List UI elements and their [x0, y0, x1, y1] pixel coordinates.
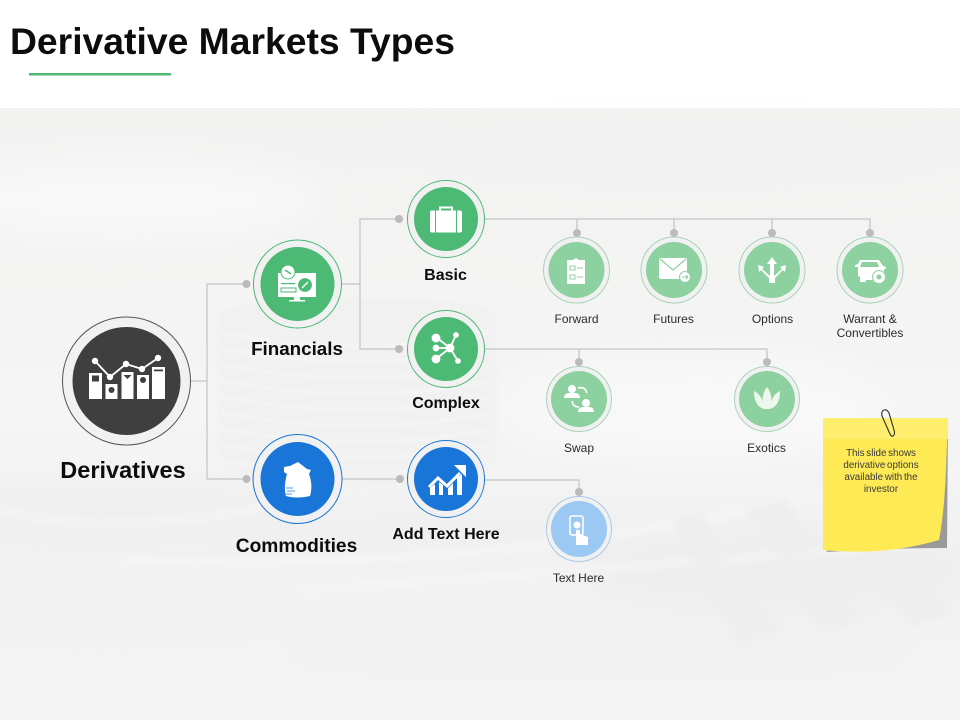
icon: bar and line chart: [89, 355, 165, 399]
note text: derivative options: [843, 460, 919, 471]
label: Basic: Basic: [424, 267, 467, 284]
sticky note: [823, 410, 948, 552]
title: Derivative Markets Types: [10, 20, 455, 62]
banknote numerals: [670, 490, 950, 642]
node: Futures: [641, 237, 707, 326]
label: Exotics: Exotics: [747, 441, 786, 455]
node: Derivatives: [60, 317, 190, 483]
label: Warrant and Convertibles: Warrant &: [843, 312, 897, 326]
node: Swap: [546, 366, 612, 455]
icon: people swap: [564, 385, 594, 412]
label: Forward: Forward: [554, 312, 599, 326]
label: Swap: Swap: [564, 441, 594, 455]
node: Basic: [408, 180, 484, 284]
node: Financials: [251, 240, 343, 359]
icon: network: [432, 333, 460, 363]
label: Text Here: Text Here: [553, 571, 604, 585]
icon: mail with arrow: [659, 258, 690, 282]
node: Forward: [544, 237, 610, 326]
connector lines: [190, 219, 870, 492]
icon: car with gear: [855, 260, 886, 284]
node: Complex: [408, 310, 484, 412]
label: Futures: Futures: [653, 312, 694, 326]
node: Exotics: [734, 366, 800, 455]
label: Derivatives: Derivatives: [60, 457, 186, 483]
banknote streaks: [0, 470, 960, 590]
icon: monitor with coins: [278, 265, 316, 302]
icon: growth chart: [429, 465, 466, 495]
note text: This slide shows: [846, 448, 916, 459]
label: Warrant and Convertibles: Convertibles: [837, 326, 903, 340]
node: Options: [739, 237, 805, 326]
icon: checklist: [567, 258, 585, 284]
label: Add Text Here: Add Text Here: [392, 526, 500, 543]
title underline: [29, 73, 171, 76]
label: Complex: Complex: [412, 395, 480, 412]
icon: leaves: [754, 387, 780, 409]
connector dots: [242, 215, 874, 496]
node: Warrant and Convertibles: [837, 237, 903, 340]
node: Text Here: [546, 496, 612, 585]
icon: briefcase: [430, 208, 462, 233]
note text: available with the: [844, 472, 918, 483]
icon: hand on phone: [570, 516, 588, 545]
label: Financials: Financials: [251, 338, 343, 359]
node: Commodities: [236, 434, 357, 557]
label: Commodities: Commodities: [236, 536, 357, 557]
icon: sack: [284, 462, 311, 498]
coin stack: [218, 298, 497, 485]
node: Add Text Here: [392, 440, 500, 543]
note text: investor: [864, 484, 899, 495]
label: Options: Options: [752, 312, 793, 326]
icon: three arrows: [758, 257, 786, 283]
icon: paperclip: [882, 410, 894, 436]
